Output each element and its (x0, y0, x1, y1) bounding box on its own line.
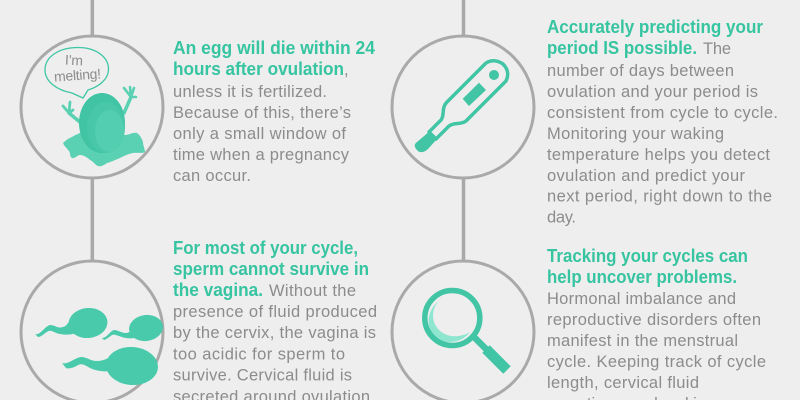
text block: egg lifespan: Because of this, there’s (173, 104, 351, 122)
text block: predicting your period: day. (547, 208, 576, 226)
text block: sperm survival: too acidic for sperm to (173, 346, 345, 364)
puddle (63, 133, 145, 166)
egg arms (63, 87, 136, 123)
text block: egg lifespan (173, 38, 375, 185)
text block: predicting your period: ovulation and your period is (547, 83, 758, 101)
text block: egg lifespan: only a small window of (173, 125, 346, 143)
text block: tracking cycles: manifest in the menstrual (547, 332, 738, 350)
handle (474, 337, 507, 370)
text block: sperm survival: the vagina. (173, 280, 263, 300)
sperm 3 (62, 345, 159, 387)
panel: melting egg icon (21, 36, 163, 178)
text block: sperm survival: sperm cannot survive in (173, 259, 369, 279)
text block: predicting your period: temperature helps you detect (547, 146, 770, 164)
speech bubble (45, 48, 109, 98)
text block: sperm survival: Without the (269, 282, 356, 300)
panel: magnifying glass icon (392, 261, 534, 400)
text block: sperm survival: presence of fluid produced (173, 303, 377, 321)
text block: predicting your period: The (703, 40, 731, 58)
sperm 2 (102, 313, 165, 343)
text block: predicting your period (547, 17, 778, 226)
text block: predicting your period: Accurately predicting your (547, 17, 763, 37)
text block: tracking cycles: Tracking your cycles can (547, 246, 748, 266)
sperm 1 (35, 306, 109, 340)
text block: egg lifespan: can occur. (173, 167, 251, 185)
text block: predicting your period: next period, right down to the (547, 188, 772, 206)
text block: sperm survival: survive. Cervical fluid is (173, 366, 352, 384)
thermometer bulb (415, 131, 437, 152)
text block: tracking cycles: reproductive disorders often (547, 311, 761, 329)
text block: egg lifespan: , (344, 61, 349, 79)
panel: sperm icon (21, 261, 165, 400)
panel: thermometer icon (392, 36, 534, 178)
text block: sperm survival: by the cervix, the vagina is (173, 324, 376, 342)
thermometer body (429, 61, 508, 139)
text block: tracking cycles (547, 246, 766, 400)
speech bubble: I'm (65, 52, 83, 68)
text block: predicting your period: number of days between (547, 62, 734, 80)
egg (79, 93, 125, 153)
thermometer display (463, 83, 486, 106)
text block: predicting your period: Monitoring your waking (547, 125, 724, 143)
speech bubble: melting! (53, 65, 101, 85)
text block: predicting your period: consistent from cycle to cycle. (547, 104, 778, 122)
text block: egg lifespan: hours after ovulation (173, 59, 344, 79)
text block: sperm survival: For most of your cycle, (173, 238, 358, 258)
thermometer dot (489, 70, 499, 80)
text block: egg lifespan: time when a pregnancy (173, 146, 350, 164)
lens highlight (429, 301, 470, 342)
text block: egg lifespan: An egg will die within 24 (173, 38, 375, 58)
lens ring (425, 290, 480, 346)
text block: tracking cycles: cycle. Keeping track of cycle (547, 353, 766, 371)
text block: tracking cycles: help uncover problems. (547, 267, 737, 287)
text block: tracking cycles: Hormonal imbalance and (547, 290, 736, 308)
text block: egg lifespan: unless it is fertilized. (173, 83, 327, 101)
text block: predicting your period: ovulation and predict your (547, 167, 746, 185)
text block: predicting your period: period IS possible. (547, 38, 697, 58)
text block: sperm survival (173, 238, 377, 400)
text block: tracking cycles: length, cervical fluid (547, 374, 699, 392)
